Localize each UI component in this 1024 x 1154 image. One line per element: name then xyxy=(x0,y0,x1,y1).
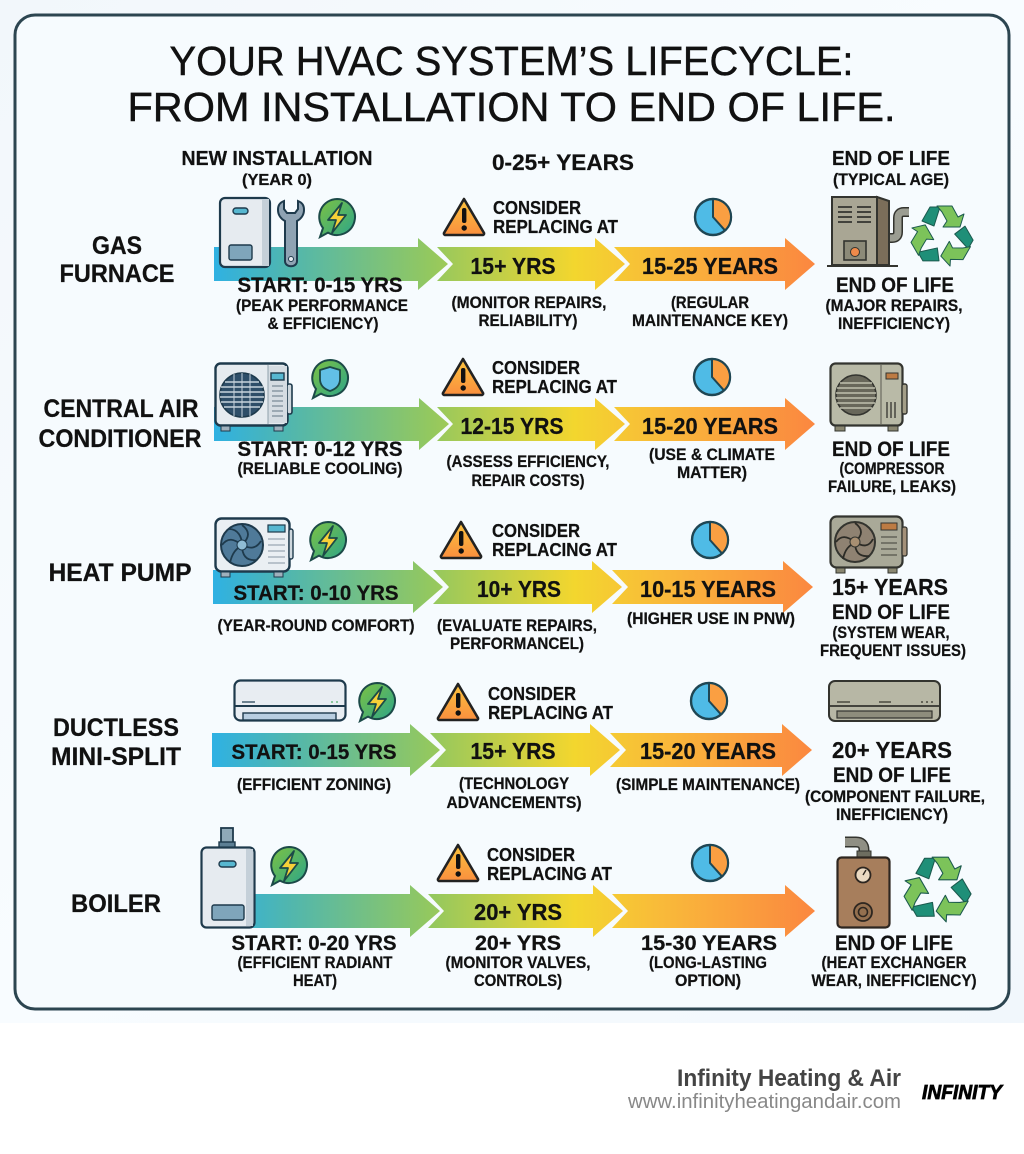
footer: logo: INFINITY xyxy=(922,1082,1004,1104)
text: technology advancements xyxy=(446,774,582,812)
text: end of life xyxy=(812,932,976,990)
text: monitor valves: CONTROLS) xyxy=(474,971,562,990)
icon: recycle xyxy=(905,206,978,270)
text: end of life: END OF LIFE xyxy=(832,601,950,624)
text: start xyxy=(232,932,396,990)
text: monitor valves: (MONITOR VALVES, xyxy=(446,953,590,972)
text: start: START: 0-12 YRS xyxy=(238,438,402,461)
text: use and climate: (USE & CLIMATE xyxy=(649,445,775,464)
text: end of life: WEAR, INEFFICIENCY) xyxy=(812,971,976,990)
icon: efficiency bolt xyxy=(319,199,355,237)
row: boiler xyxy=(71,828,976,990)
row: central air conditioner xyxy=(38,358,956,496)
text: evaluate repairs: (EVALUATE REPAIRS, xyxy=(437,616,597,635)
text: evaluate repairs xyxy=(437,616,597,653)
text: long-lasting option: OPTION) xyxy=(675,971,741,990)
row: gas furnace xyxy=(60,197,978,333)
arrow: start stage xyxy=(213,561,443,613)
value: 12-15 yrs: 12-15 YRS xyxy=(460,413,564,439)
value: 15+ yrs: 15+ YRS xyxy=(470,738,556,764)
text: end of life: END OF LIFE xyxy=(835,932,953,955)
row: ductless mini-split xyxy=(51,680,985,824)
text: start: START: 0-15 YRS xyxy=(232,741,396,764)
text: assess efficiency: REPAIR COSTS) xyxy=(472,471,584,490)
label: boiler: BOILER xyxy=(71,890,161,918)
text: end of life xyxy=(828,438,956,496)
text: consider replacing xyxy=(493,198,618,237)
icon: efficiency bolt xyxy=(310,522,346,560)
text: end of life: (COMPONENT FAILURE, xyxy=(805,787,985,806)
text: start: (PEAK PERFORMANCE xyxy=(236,296,408,315)
text: long-lasting option xyxy=(641,932,777,990)
column heading: years: 0-25+ YEARS xyxy=(492,150,634,175)
text: end of life: (SYSTEM WEAR, xyxy=(832,623,950,642)
text: end of life xyxy=(826,274,962,333)
footer: company name and website: Infinity Heating & Air xyxy=(677,1065,901,1092)
text: technology advancements: ADVANCEMENTS) xyxy=(446,793,582,812)
label: ductless mini-split: MINI-SPLIT xyxy=(51,743,181,771)
text: start: (RELIABLE COOLING) xyxy=(238,459,402,478)
label: gas furnace: GAS xyxy=(92,232,142,260)
text: consider replacing: CONSIDER xyxy=(488,684,576,704)
text: monitor repairs: RELIABILITY) xyxy=(478,311,578,330)
text: end of life: END OF LIFE xyxy=(833,764,951,787)
value: 15-20 years: 15-20 YEARS xyxy=(642,413,778,439)
text: start: START: 0-15 YRS xyxy=(238,274,402,297)
icon: heat pump unit xyxy=(216,518,293,577)
text: assess efficiency xyxy=(446,452,610,490)
label: gas furnace: FURNACE xyxy=(60,260,174,288)
label: heat pump: HEAT PUMP xyxy=(48,559,192,587)
label: central air conditioner: CENTRAL AIR xyxy=(44,395,198,423)
icon: pie clock xyxy=(692,845,728,881)
column heading: new installation: (YEAR 0) xyxy=(242,172,312,189)
text: long-lasting option: (LONG-LASTING xyxy=(649,953,767,972)
text: consider replacing: REPLACING AT xyxy=(493,217,618,237)
title xyxy=(128,38,896,130)
text: start: (EFFICIENT RADIANT xyxy=(238,953,393,972)
text: end of life: (HEAT EXCHANGER xyxy=(822,953,966,972)
arrow: start stage xyxy=(214,398,449,450)
text: start: & EFFICIENCY) xyxy=(268,314,378,333)
text: consider replacing: CONSIDER xyxy=(492,358,580,378)
arrow: consider stage xyxy=(433,561,622,613)
text: consider replacing xyxy=(487,845,612,884)
text: monitor repairs: (MONITOR REPAIRS, xyxy=(452,293,606,312)
title: FROM INSTALLATION TO END OF LIFE. xyxy=(128,84,896,130)
value: 15+ yrs: 15+ YRS xyxy=(470,253,556,279)
text: end of life xyxy=(820,574,966,660)
icon: warning xyxy=(438,684,478,720)
arrow: consider stage xyxy=(437,238,625,290)
text: consider replacing: REPLACING AT xyxy=(492,540,617,560)
icon: old mini-split xyxy=(829,681,940,721)
text: end of life: 20+ YEARS xyxy=(832,737,952,763)
value: 10-15 years: 10-15 YEARS xyxy=(640,576,776,602)
text: consider replacing: REPLACING AT xyxy=(488,703,613,723)
icon: warning xyxy=(444,199,484,235)
icon: recycle xyxy=(898,857,976,926)
text: use and climate: MATTER) xyxy=(677,463,747,482)
text: monitor valves: 20+ YRS xyxy=(475,932,561,955)
arrow: start stage xyxy=(225,885,440,937)
arrow: consider stage xyxy=(430,724,620,776)
text: start: HEAT) xyxy=(293,971,337,990)
text: start xyxy=(236,274,408,333)
text: evaluate repairs: PERFORMANCEL) xyxy=(450,634,584,653)
arrow: late stage xyxy=(614,398,815,450)
arrow: start stage xyxy=(214,238,448,290)
icon: pie clock xyxy=(694,359,730,395)
text: year-round comfort: (YEAR-ROUND COMFORT) xyxy=(218,616,414,635)
value: 15-25 years: 15-25 YEARS xyxy=(642,253,778,279)
arrow: late stage xyxy=(610,724,812,776)
text: end of life: (COMPRESSOR xyxy=(840,459,944,478)
text: simple maintenance: (SIMPLE MAINTENANCE) xyxy=(616,775,800,794)
icon: furnace unit xyxy=(220,198,270,267)
arrow: start stage xyxy=(212,724,440,776)
column heading: new installation xyxy=(182,148,372,189)
text: monitor valves xyxy=(446,932,590,990)
arrow: late stage xyxy=(612,885,815,937)
text: use and climate xyxy=(649,445,775,482)
text: consider replacing: CONSIDER xyxy=(492,521,580,541)
icon: pie clock xyxy=(691,683,727,719)
text: consider replacing xyxy=(492,521,617,560)
icon: pie clock xyxy=(692,522,728,558)
label: ductless mini-split xyxy=(51,714,181,771)
text: end of life: FAILURE, LEAKS) xyxy=(828,477,956,496)
icon: old furnace xyxy=(827,197,909,266)
title: YOUR HVAC SYSTEM’S LIFECYCLE: xyxy=(170,38,854,84)
icon: efficiency bolt xyxy=(359,683,395,721)
icon: warning xyxy=(441,522,481,558)
text: regular maintenance xyxy=(632,293,788,330)
text: efficient zoning: (EFFICIENT ZONING) xyxy=(237,775,391,794)
text: start: START: 0-10 YRS xyxy=(234,582,398,605)
text: end of life: END OF LIFE xyxy=(832,438,950,461)
text: end of life xyxy=(805,737,985,824)
text: end of life: 15+ YEARS xyxy=(832,574,948,600)
icon: warning xyxy=(438,845,478,881)
row: heat pump xyxy=(48,516,966,660)
label: ductless mini-split: DUCTLESS xyxy=(53,714,179,742)
icon: shield bubble xyxy=(312,360,348,398)
column heading: end of life: END OF LIFE xyxy=(832,148,950,170)
text: start xyxy=(238,438,402,478)
text: consider replacing: REPLACING AT xyxy=(492,377,617,397)
label: gas furnace xyxy=(60,232,174,288)
value: 15-20 years: 15-20 YEARS xyxy=(640,738,776,764)
text: end of life: FREQUENT ISSUES) xyxy=(820,641,966,660)
icon: pie clock xyxy=(695,199,731,235)
arrow: consider stage xyxy=(428,885,623,937)
icon: old boiler xyxy=(838,842,890,928)
text: assess efficiency: (ASSESS EFFICIENCY, xyxy=(446,452,610,471)
text: end of life: END OF LIFE xyxy=(836,274,954,297)
icon: efficiency bolt xyxy=(271,847,307,885)
arrow: late stage xyxy=(614,238,815,290)
column heading: end of life xyxy=(832,148,950,189)
icon: AC unit xyxy=(216,364,292,431)
text: start: START: 0-20 YRS xyxy=(232,932,396,955)
icon: wrench xyxy=(278,201,304,266)
text: technology advancements: (TECHNOLOGY xyxy=(459,774,570,793)
text: monitor repairs xyxy=(452,293,606,330)
value: 10+ yrs: 10+ YRS xyxy=(477,576,561,602)
arrow: late stage xyxy=(612,561,813,613)
icon: boiler unit xyxy=(202,828,254,928)
text: consider replacing xyxy=(488,684,613,723)
label: central air conditioner xyxy=(38,395,202,453)
arrow: consider stage xyxy=(437,398,625,450)
text: end of life: (MAJOR REPAIRS, xyxy=(826,296,962,315)
value: 20+ yrs: 20+ YRS xyxy=(474,899,562,925)
label: central air conditioner: CONDITIONER xyxy=(38,425,202,453)
text: end of life: INEFFICIENCY) xyxy=(838,314,950,333)
text: consider replacing: CONSIDER xyxy=(487,845,575,865)
text: end of life: INEFFICIENCY) xyxy=(836,805,948,824)
text: consider replacing: CONSIDER xyxy=(493,198,581,218)
text: long-lasting option: 15-30 YEARS xyxy=(641,932,777,955)
icon: mini-split unit xyxy=(234,680,346,720)
footer: company name and website xyxy=(627,1065,901,1113)
text: regular maintenance: MAINTENANCE KEY) xyxy=(632,311,788,330)
footer: company name and website: www.infinityheatingandair.com xyxy=(627,1091,901,1113)
text: regular maintenance: (REGULAR xyxy=(671,293,749,312)
text: higher use: (HIGHER USE IN PNW) xyxy=(627,609,795,628)
column heading: end of life: (TYPICAL AGE) xyxy=(833,170,949,189)
icon: old heat pump xyxy=(830,516,907,573)
column heading: new installation: NEW INSTALLATION xyxy=(182,148,372,170)
text: consider replacing xyxy=(492,358,617,397)
icon: warning xyxy=(443,359,483,395)
text: consider replacing: REPLACING AT xyxy=(487,864,612,884)
icon: old AC unit xyxy=(830,364,907,431)
